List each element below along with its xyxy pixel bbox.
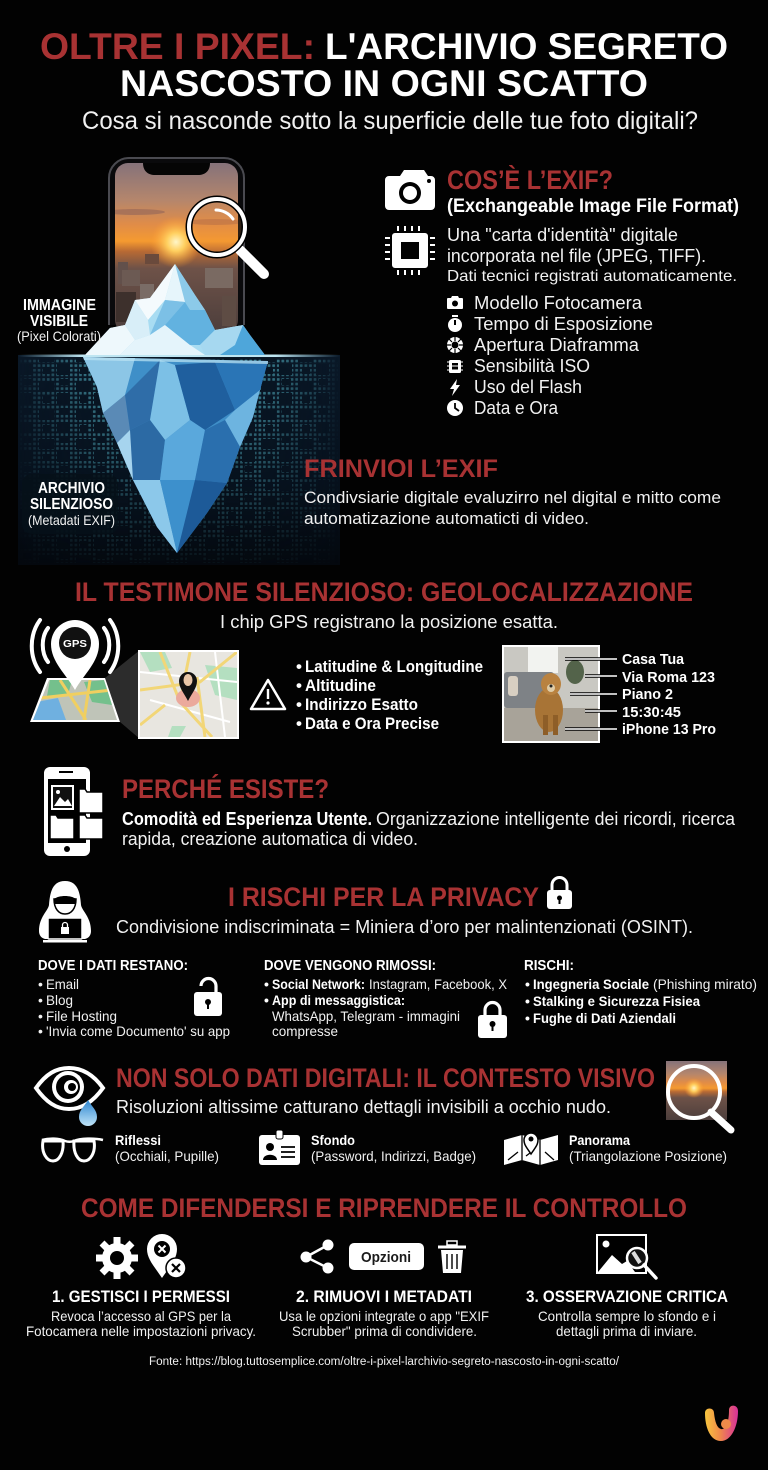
item: background: Sfondo [311,1132,355,1148]
icon: chip [385,226,435,275]
icon: share [300,1240,334,1274]
column: where data is removed: WhatsApp, Telegram - immagini [272,1008,460,1024]
column: where data stays: • [38,992,43,1008]
column: risks: (Phishing mirato) [653,976,757,992]
heading: what is EXIF: (Exchangeable Image File Format) [447,196,739,217]
panel: garbled EXIF note: automatizazione automaticti di video. [304,509,589,528]
icon: photo with magnifier [666,1061,731,1130]
list: GPS data: Altitudine [305,676,376,695]
text: why it exists: Organizzazione intelligente dei ricordi, ricerca [376,809,736,829]
column: risks: • [525,976,530,992]
text: GPS chips: I chip GPS registrano la posizione esatta. [220,612,558,632]
column: where data is removed: Social Network: [272,976,365,992]
item: panorama [504,1132,727,1165]
heading: privacy risks: I RISCHI PER LA PRIVACY [228,882,539,912]
heading: geolocation: IL TESTIMONE SILENZIOSO: GEOLOCALIZZAZIONE [75,577,693,607]
label: visible image: IMMAGINE [23,297,96,314]
title: L'ARCHIVIO SEGRETO [325,26,728,67]
panel: why it exists [44,767,736,856]
icon: trash [438,1241,466,1273]
text: EXIF description: Dati tecnici registrati automaticamente. [447,268,737,285]
step 2: remove metadata: Usa le opzioni integrate o app "EXIF [279,1308,489,1324]
button: options [349,1243,424,1270]
column: risks: • [525,993,530,1009]
step 2: remove metadata: Scrubber" prima di condividere. [292,1323,477,1339]
column: where data stays: File Hosting [46,1008,117,1024]
list: GPS data: Data e Ora Precise [305,714,439,733]
magnifying glass [189,199,264,274]
text: why it exists [122,809,736,849]
label: visible image: VISIBILE [30,313,88,330]
icon: photo with magnifier [597,1235,656,1278]
heading: what is EXIF: COS’È L’EXIF? [447,164,613,195]
step 3: critical observation: Controlla sempre lo sfondo e i [538,1308,716,1324]
step 1: manage permissions: Revoca l’accesso al GPS per la [51,1308,231,1324]
panel: garbled EXIF note: Condivsiarie digitale evaluzirro nel digital e mitto come [304,488,721,507]
column: where data stays: Blog [46,992,73,1008]
panel: garbled EXIF note [304,455,721,528]
label: silent archive: (Metadati EXIF) [28,512,115,528]
panel: how to defend [26,1193,728,1339]
icon: eye with drop [36,1068,103,1126]
heading: how to defend: COME DIFENDERSI E RIPRENDERE IL CONTROLLO [81,1193,687,1223]
icon: lock [478,1003,507,1038]
panel: geolocation [30,577,716,743]
iceberg below water [83,357,268,553]
label: visible image [17,297,101,344]
panel: garbled EXIF note: FRINVIOI L’EXIF [304,455,498,483]
list: EXIF data: Modello Fotocamera [474,293,643,313]
column: where data stays: • [38,976,43,992]
step 3: critical observation: dettagli prima di inviare. [556,1323,697,1339]
list: GPS data: • [296,676,302,695]
icon: phone with folders [44,767,103,856]
text: why it exists: rapida, creazione automatica di video. [122,829,418,849]
heading: what is EXIF [447,164,739,217]
text: EXIF description [447,225,737,285]
label: visible image: (Pixel Colorati) [17,328,101,344]
item: background [259,1130,476,1165]
list: EXIF data: Sensibilità ISO [474,356,590,376]
callouts: photo metadata: iPhone 13 Pro [622,721,716,738]
column: where data is removed: DOVE VENGONO RIMOSSI: [264,958,436,974]
step 1: manage permissions [26,1234,256,1339]
panel: visual context [36,1061,731,1165]
panel: iceberg illustration [17,158,340,565]
list: EXIF data: Uso del Flash [474,377,582,397]
panel: what is EXIF [385,164,739,418]
step 2: remove metadata: 2. RIMUOVI I METADATI [296,1287,472,1306]
item: reflections: (Occhiali, Pupille) [115,1148,219,1164]
icon: hacker [39,881,91,942]
column: risks: • [525,1010,530,1026]
column: where data stays: Email [46,976,79,992]
subtitle: Cosa si nasconde sotto la superficie delle tue foto digitali? [82,107,698,135]
panel: privacy risks [38,878,757,1039]
map detail [138,650,239,739]
callouts: photo metadata: Via Roma 123 [622,669,715,686]
column: where data stays [38,958,230,1039]
step 3: critical observation: 3. OSSERVAZIONE CRITICA [526,1287,728,1306]
callouts: photo metadata: 15:30:45 [622,704,681,721]
item: reflections [42,1132,219,1164]
icon: GPS pin on folded map: GPS [63,638,87,650]
iceberg above water [85,264,265,355]
list: GPS data: Latitudine & Longitudine [305,657,483,676]
list: GPS data: • [296,695,302,714]
list: GPS data [296,657,483,733]
text: EXIF description: incorporata nel file (JPEG, TIFF). [447,246,706,266]
step 1: manage permissions: Fotocamera nelle impostazioni privacy. [26,1323,256,1339]
list: EXIF data: Apertura Diaframma [474,335,640,355]
list: EXIF data: Data e Ora [474,398,559,418]
icon: warning [251,680,285,709]
label: silent archive: ARCHIVIO [38,480,105,497]
column: where data is removed: • [264,992,269,1008]
column: where data is removed: compresse [272,1023,338,1039]
source line: Fonte: https://blog.tuttosemplice.com/oltre-i-pixel-larchivio-segreto-nascosto-in-ogni-scatto/ [149,1356,620,1368]
text: visual context: Risoluzioni altissime catturano dettagli invisibili a occhio nudo. [116,1097,611,1117]
column: risks [524,958,757,1026]
list: GPS data: • [296,714,302,733]
icon: gear and pin [96,1234,186,1279]
heading: why it exists: PERCHÉ ESISTE? [122,773,329,804]
column: where data stays: • [38,1008,43,1024]
smartphone with sunset photo [105,158,244,333]
label: silent archive: SILENZIOSO [30,496,113,513]
text: EXIF description: Una "carta d'identità" digitale [447,225,678,245]
button: options: Opzioni [361,1249,411,1266]
list: GPS data: • [296,657,302,676]
logo [705,1406,738,1441]
callouts: photo metadata: Piano 2 [622,686,673,703]
icon: camera [385,170,435,210]
item: panorama: Panorama [569,1132,630,1148]
icon: closed lock [547,878,572,909]
title [40,26,728,104]
heading: visual context: NON SOLO DATI DIGITALI: IL CONTESTO VISIVO [116,1063,655,1093]
callouts: photo metadata [565,651,716,738]
photo: dog in living room [502,645,600,743]
step 2: remove metadata [279,1240,489,1339]
column: risks: Fughe di Dati Aziendali [533,1010,676,1026]
text: why it exists: Comodità ed Esperienza Utente. [122,809,372,829]
step 1: manage permissions: 1. GESTISCI I PERMESSI [52,1287,230,1306]
icon: open lock [194,979,222,1016]
column: where data is removed [264,958,508,1039]
column: where data stays: DOVE I DATI RESTANO: [38,958,188,974]
list: GPS data: Indirizzo Esatto [305,695,418,714]
column: risks: RISCHI: [524,958,574,974]
item: reflections: Riflessi [115,1132,161,1148]
callouts: photo metadata: Casa Tua [622,651,685,668]
column: risks: Ingegneria Sociale [533,976,649,992]
item: background: (Password, Indirizzi, Badge) [311,1148,476,1164]
text: privacy summary: Condivisione indiscriminata = Miniera d’oro per malintenzionati (OSINT). [116,917,693,937]
label: silent archive [28,480,115,528]
icon: GPS pin on folded map [30,620,140,739]
column: where data stays: • [38,1023,43,1039]
column: risks: Stalking e Sicurezza Fisiea [533,993,700,1009]
item: panorama: (Triangolazione Posizione) [569,1148,727,1164]
column: where data is removed: Instagram, Facebook, X [369,976,508,992]
column: where data is removed: App di messaggistica: [272,992,405,1008]
data sea with metadata dots [18,354,340,565]
column: where data is removed: • [264,976,269,992]
title: NASCOSTO IN OGNI SCATTO [120,63,648,104]
title: OLTRE I PIXEL: [40,26,315,67]
list: EXIF data: Tempo di Esposizione [474,314,653,334]
column: where data stays: 'Invia come Documento' su app [46,1023,230,1039]
step 3: critical observation [526,1235,728,1339]
list: EXIF data [447,293,653,418]
